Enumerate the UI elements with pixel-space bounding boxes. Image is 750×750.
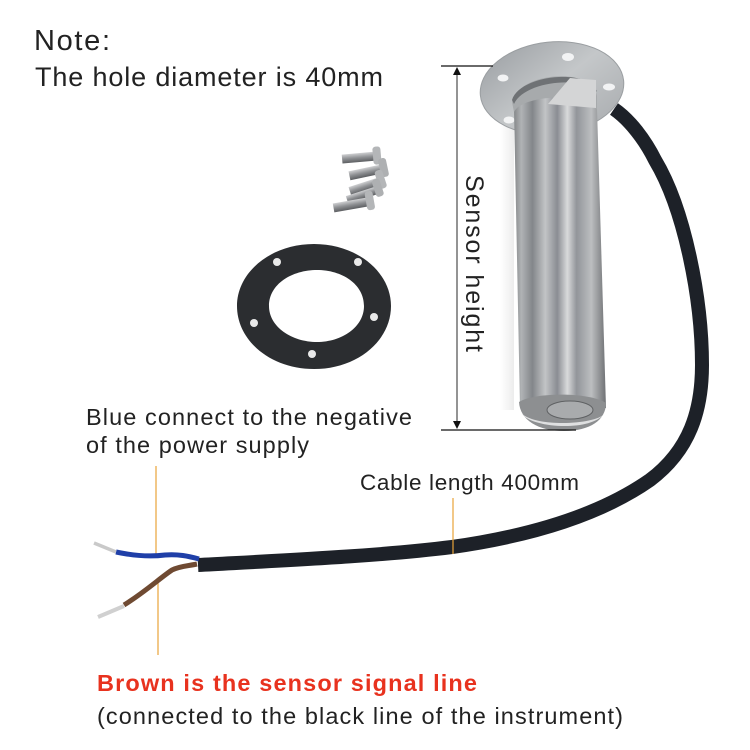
tube end cap [519, 395, 606, 431]
bare conductors [94, 543, 116, 552]
stripped wires [94, 543, 199, 617]
hole diameter note: The hole diameter is 40mm [35, 62, 383, 92]
mounting flange [476, 35, 628, 141]
stainless tube [512, 76, 606, 408]
blue wire [116, 552, 199, 559]
blue wire label: of the power supply [86, 432, 309, 458]
brown wire [124, 564, 197, 605]
note heading: Note: [34, 25, 110, 57]
leader lines [156, 466, 453, 655]
sensor cable [198, 109, 702, 565]
mounting screws [332, 146, 389, 216]
sensor height dimension [441, 66, 576, 430]
blue wire label: Blue connect to the negative [86, 404, 412, 430]
rubber gasket [237, 244, 391, 369]
soft shadow beside tube [500, 125, 514, 410]
sensor height label: Sensor height [460, 175, 488, 352]
sensor probe [476, 35, 628, 431]
blue wire label [86, 404, 412, 458]
brown wire heading: Brown is the sensor signal line [97, 670, 477, 696]
cable length label: Cable length 400mm [360, 470, 579, 495]
brown wire note: (connected to the black line of the instrument) [97, 703, 623, 729]
